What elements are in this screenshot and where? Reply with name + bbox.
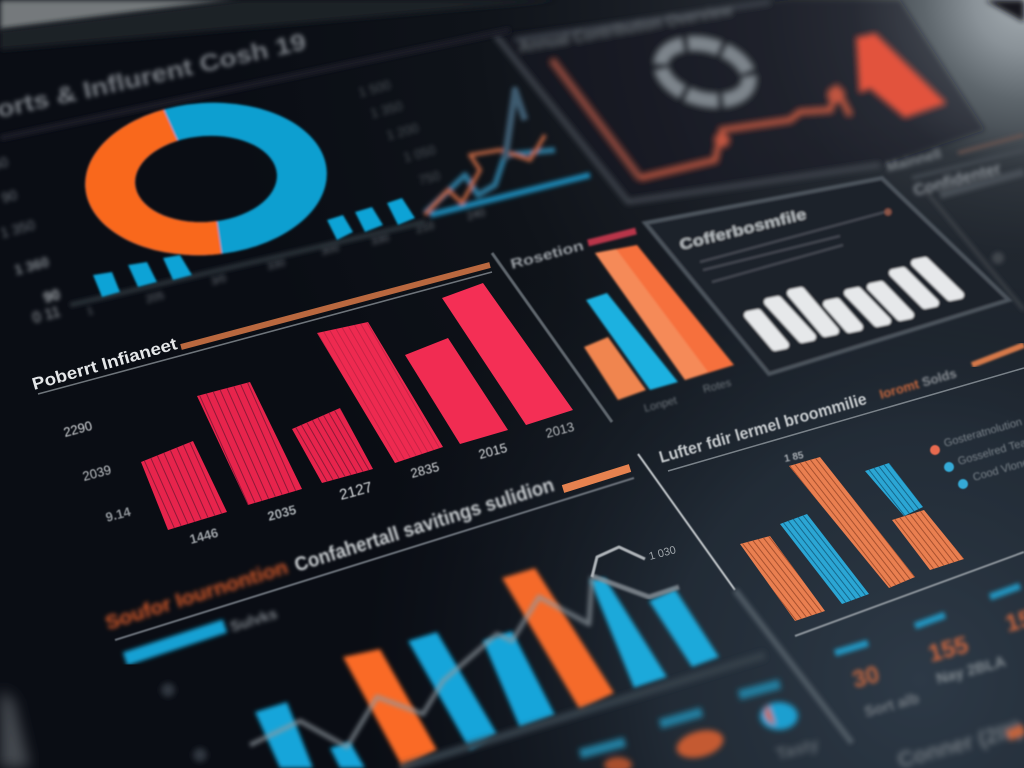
axis labels: donut panel: 90 — [42, 286, 62, 307]
legend — [930, 416, 1024, 489]
axis labels: donut panel: 330 — [370, 232, 391, 248]
legend: Gosteratnolution — [943, 416, 1023, 450]
line overlay — [250, 544, 679, 747]
orange heading tag: Ioromt Solds — [878, 366, 958, 402]
donut chart — [80, 95, 332, 263]
axis labels: donut panel: 205 — [145, 290, 166, 306]
heading: middle bars: Rosetion — [509, 237, 585, 272]
red chart labels: 1446 — [188, 525, 220, 547]
line chart: blue and orange trends: 1 350 — [369, 98, 404, 121]
axis labels: donut panel: 90 — [0, 186, 19, 206]
accent bar — [563, 468, 630, 489]
red chart labels: 2035 — [266, 502, 298, 524]
heading: savings: Confahertall savitings sulidion — [292, 474, 557, 577]
divider: red chart and middle chart — [492, 253, 612, 422]
line chart: blue and orange trends: 750 — [417, 168, 442, 188]
heading: lower right: Lufter fdir lermel broommilie — [657, 389, 869, 467]
panel: middle orange and blue bars: Rotes — [702, 377, 733, 396]
panel: top right corner text: Confidenter — [912, 160, 1003, 200]
panel: donut chart and title — [0, 29, 590, 327]
panel: top right corner text: Mainnell — [885, 145, 943, 175]
icon: small pie — [760, 702, 798, 730]
axis labels: donut panel — [0, 153, 487, 327]
divider: savings and right panel — [638, 454, 852, 743]
heading: savings — [103, 474, 557, 635]
line chart: blue and orange trends: 1 500 — [357, 77, 392, 100]
bars: savings — [255, 568, 719, 768]
icon: grey ring — [655, 34, 755, 110]
axis labels: donut panel: 210 — [415, 220, 436, 236]
panel: lower right stats: 30 — [850, 661, 882, 694]
panel: bottom row stats: Tasty — [774, 734, 821, 764]
area chart: red peak — [857, 34, 945, 117]
small blue bars — [93, 198, 415, 297]
panel: top right corner text — [885, 135, 1024, 310]
line chart: blue and orange trends: 1 050 — [402, 142, 437, 165]
panel: white bar chart — [645, 178, 1009, 374]
red chart labels — [62, 418, 576, 547]
bottom stat value — [673, 725, 727, 763]
legend: sales: Sulvks — [228, 605, 279, 636]
panel: lower right bars — [657, 345, 1024, 636]
axis labels: donut panel: 300 — [320, 242, 341, 258]
red chart labels: 2835 — [409, 459, 441, 481]
panel: top right line and area chart — [495, 0, 985, 202]
heading: top right panel: Annual Contribution Overview — [518, 2, 734, 56]
heading: red bar chart: Poberrt Infianeet — [30, 334, 180, 394]
red chart labels: 9.14 — [104, 504, 133, 525]
heading: savings: Soufor Iournontion — [103, 557, 291, 635]
red chart labels: 2127 — [338, 479, 374, 504]
striped bars — [740, 457, 964, 621]
axis labels: donut panel: 240 — [466, 207, 487, 223]
blurred axis numbers — [161, 683, 207, 762]
panel: red bar chart — [30, 265, 576, 547]
axis line — [70, 222, 425, 305]
panel: bottom row stats — [400, 655, 1024, 768]
red chart labels: 2039 — [81, 462, 113, 484]
axis labels: donut panel: 1 — [86, 305, 95, 318]
axis labels: donut panel: 0 11 — [31, 303, 62, 327]
panel: lower right stats: Nay 2BLA — [935, 653, 1008, 688]
axis labels: donut panel: 1 360 — [13, 253, 51, 278]
line chart: blue and orange trends: 1 200 — [385, 120, 420, 143]
panel: middle orange and blue bars: Lonpet — [643, 395, 678, 415]
panel: lower right stats: Sort alb — [863, 690, 921, 721]
panel: savings bars and line — [103, 468, 719, 768]
axis labels: donut panel: 330 — [266, 257, 287, 273]
line overlay: 1 030 — [648, 544, 677, 563]
heading: cost title: orts & Influrent Cosh 19 — [0, 29, 309, 124]
red chart labels: 2013 — [544, 419, 576, 441]
legend: sales — [125, 605, 279, 659]
panel: middle orange and blue bars — [509, 231, 734, 415]
red chart labels: 2015 — [477, 440, 509, 462]
heading accent bar — [181, 265, 490, 347]
axis labels: donut panel: 3/0 — [210, 272, 228, 288]
heading: white bar chart: Cofferbosmfile — [678, 206, 808, 254]
red chart labels: 2290 — [62, 418, 94, 440]
panel: lower right bars: 1 85 — [783, 450, 805, 465]
panel: lower right stats: 155 — [926, 631, 971, 668]
panel: lower right stats — [835, 586, 1024, 721]
line chart: blue and orange trends — [357, 77, 590, 215]
red bars — [141, 283, 573, 530]
white bars — [748, 261, 960, 347]
line chart: red trend — [552, 60, 640, 178]
